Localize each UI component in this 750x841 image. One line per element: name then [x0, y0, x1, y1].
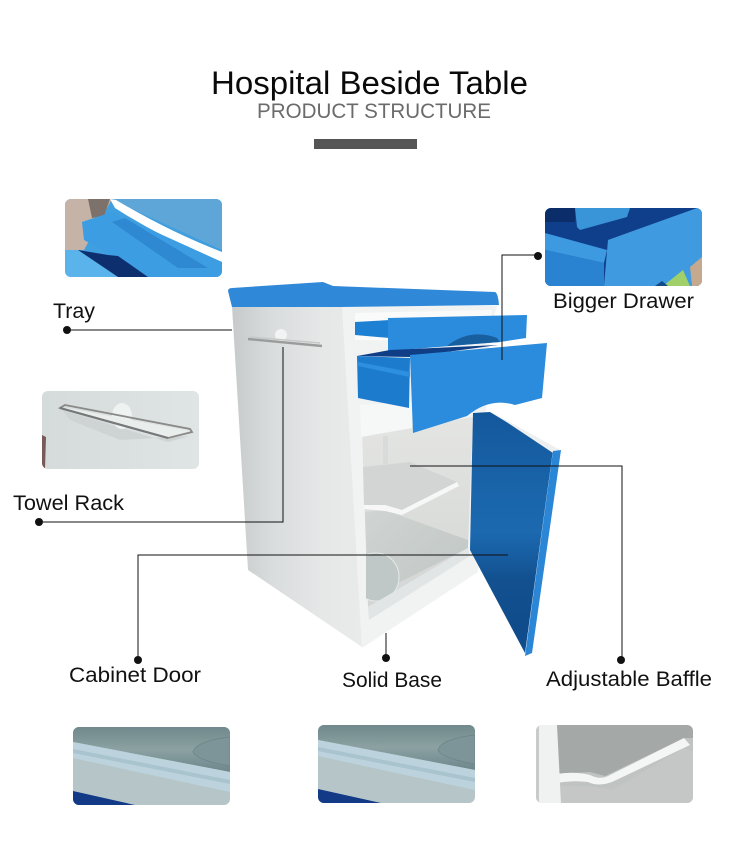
upper drawer: [355, 315, 527, 351]
shelf: [363, 462, 457, 510]
base lip: [368, 548, 470, 620]
label: towel rack: [13, 492, 125, 526]
label: bigger drawer: Bigger Drawer: [553, 290, 694, 313]
leader: solid base: [382, 633, 390, 662]
label: cabinet door: Cabinet Door: [69, 664, 201, 687]
shelf supports: [383, 436, 388, 464]
cabinet top: [228, 282, 499, 307]
cabinet front frame: [342, 306, 497, 648]
drawer openings: [355, 310, 492, 342]
photo: cabinet door detail: [73, 727, 230, 805]
bowl: [366, 552, 400, 602]
photo: tray: [65, 199, 222, 277]
label: tray: Tray: [53, 300, 95, 323]
bedside cabinet: [228, 282, 561, 656]
photo: towel rack: [42, 391, 199, 469]
label: tray: [53, 300, 232, 334]
photo: bigger drawer: [545, 208, 702, 286]
label: towel rack: Towel Rack: [13, 492, 125, 515]
subtitle: PRODUCT STRUCTURE: [257, 100, 491, 123]
cabinet left side panel: [232, 306, 362, 647]
leader: cabinet door: [134, 555, 508, 664]
cabinet interior: [362, 417, 473, 607]
leader: bigger drawer: [502, 252, 542, 360]
title: Hospital Beside Table: [211, 65, 528, 101]
leader: adjustable baffle: [410, 466, 625, 664]
towel rail: [248, 329, 322, 346]
lower drawer: [357, 343, 547, 433]
label: solid base: Solid Base: [342, 669, 442, 692]
photo: adjustable baffle detail: [536, 725, 693, 803]
title accent bar: [314, 139, 417, 149]
leader: towel rack: [39, 347, 283, 522]
photo: solid base detail: [318, 725, 475, 803]
door: [470, 411, 561, 656]
label: adjustable baffle: Adjustable Baffle: [546, 668, 712, 691]
